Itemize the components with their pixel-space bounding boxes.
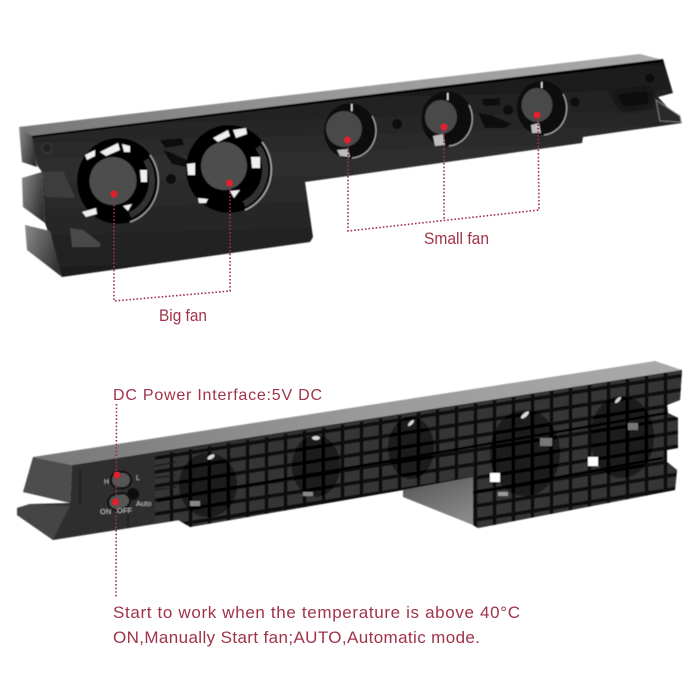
left prongs [19,127,62,277]
label: small fan: Small fan [424,229,489,248]
screw holes [42,74,654,184]
callout: big fan leader [110,180,233,301]
gray stand [403,477,473,525]
front face [31,59,682,277]
switch: H/L toggle [104,472,140,488]
block over left fan [42,171,75,198]
callout: small fan leader [344,112,540,231]
slots [157,413,667,501]
icon: small fan 1 [324,104,376,158]
front face [17,370,682,540]
dark top edge line [31,61,663,137]
switch: H/L toggle: L [136,475,140,482]
vent slots right [478,98,512,128]
icons: fans behind grid [179,396,654,517]
block lower left [70,228,100,247]
control panel left grooves [80,462,176,528]
label: DC power interface: DC Power Interface:5V DC [113,387,322,404]
vent grid [155,370,682,528]
icon: small fan 3 [517,81,567,135]
switch: ON/OFF/Auto: Auto [136,499,151,508]
shadow far right [612,88,652,110]
switch: ON/OFF/Auto: OFF [117,506,132,515]
icon: big fan right [186,125,272,213]
top edge strip [19,54,663,137]
callout: switch leader [112,404,120,598]
switch: ON/OFF/Auto [100,488,151,516]
text: temperature note: Start to work when the temperature is above 40°C [113,603,520,622]
switch: H/L toggle: H [104,479,109,486]
switch: ON/OFF/Auto: ON [100,507,111,516]
middle vent slots [160,138,187,167]
fan blade highlights [190,396,638,506]
icon: small fan 2 [422,92,472,146]
text: mode note: ON,Manually Start fan;AUTO,Automatic mode. [113,628,480,647]
foot highlight [17,504,70,540]
see-through gaps [490,457,598,482]
device: top view with fans [19,54,682,277]
right clip notch [656,100,681,122]
left side [23,457,72,503]
icon: big fan left [77,138,159,224]
label: big fan: Big fan [159,306,207,325]
device: rear view with vent grid [17,360,685,540]
top edge strip [33,361,682,465]
